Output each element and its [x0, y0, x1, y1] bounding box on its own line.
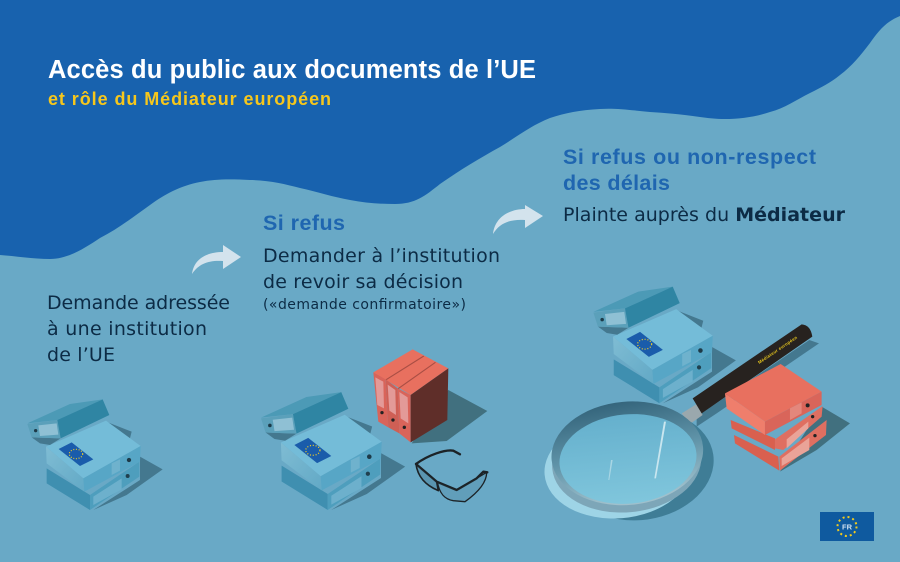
EU flag FR	[820, 512, 874, 541]
step 1 text: Demande adressée	[47, 292, 230, 314]
step 1 text	[47, 292, 230, 366]
magnifier	[540, 324, 819, 530]
binders stack 1	[27, 399, 163, 510]
subtitle: et rôle du Médiateur européen	[48, 89, 331, 109]
step 2 text: Demander à l’institution	[263, 245, 500, 267]
title: Accès du public aux documents de l’UE	[48, 56, 536, 84]
glasses	[416, 450, 487, 502]
arrow 1	[192, 245, 241, 274]
step 3 text: Plainte auprès du Médiateur	[563, 204, 846, 226]
arrow 2	[493, 205, 543, 234]
step 1 text: de l’UE	[47, 344, 115, 366]
step 2 text	[263, 245, 500, 313]
red binder stack	[725, 364, 850, 472]
step 3 heading	[563, 145, 816, 195]
magnifier: Médiateur européen	[757, 335, 798, 365]
red upright binders	[373, 349, 487, 443]
step 2 heading: Si refus	[263, 211, 345, 235]
EU flag FR: FR	[842, 522, 853, 532]
step 1 text: à une institution	[47, 318, 207, 340]
step 2 text: de revoir sa décision	[263, 271, 463, 293]
step 3 heading: des délais	[563, 171, 670, 195]
step 2 text: («demande confirmatoire»)	[263, 297, 466, 313]
step 3 heading: Si refus ou non-respect	[563, 145, 816, 169]
blue wave header	[0, 0, 900, 259]
binders stack 2	[261, 392, 405, 510]
binders stack 3	[593, 287, 736, 403]
